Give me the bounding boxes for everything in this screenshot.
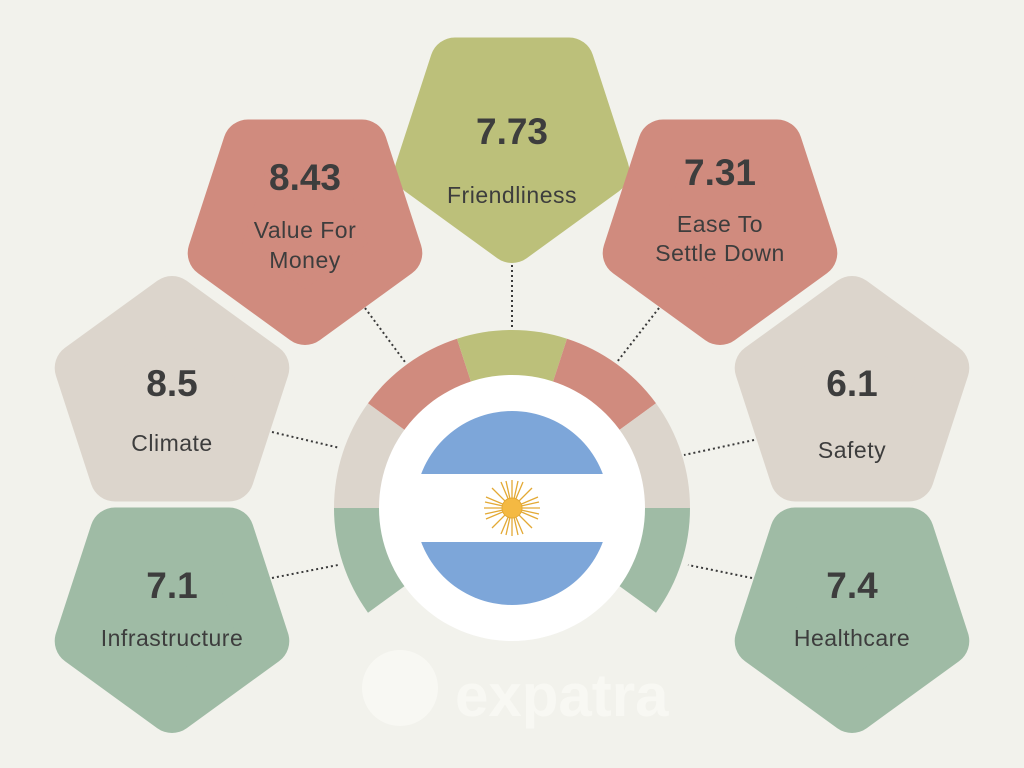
ring chart <box>334 330 690 641</box>
panel: safety <box>760 301 944 476</box>
panel: friendliness: 7.73 <box>476 111 548 152</box>
panel: ease to settle down: 7.31 <box>684 152 756 193</box>
panel: value for money: 8.43 <box>269 157 341 198</box>
panel: healthcare: 7.4 <box>826 565 878 606</box>
panel: healthcare: Healthcare <box>794 625 910 651</box>
panel: ease to settle down <box>628 144 812 320</box>
panel: value for money: Value For <box>254 217 356 243</box>
panel: ease to settle down: Ease To <box>677 211 763 237</box>
panel: safety: Safety <box>818 437 886 463</box>
logo: expatra watermark: expatra <box>455 662 669 729</box>
panel: infrastructure: 7.1 <box>146 565 198 606</box>
panel: climate: 8.5 <box>146 363 198 404</box>
panel: infrastructure: Infrastructure <box>101 625 243 651</box>
panel: friendliness <box>420 62 604 238</box>
panel: value for money: Money <box>269 247 341 273</box>
panel: value for money <box>213 144 397 320</box>
panel: healthcare <box>760 532 944 708</box>
panel: climate: Climate <box>131 430 213 456</box>
connector lines <box>272 265 754 578</box>
panel: safety: 6.1 <box>826 363 878 404</box>
panel: friendliness: Friendliness <box>447 182 577 208</box>
panel: infrastructure <box>80 532 264 708</box>
icon: argentina flag <box>421 411 603 605</box>
panel: climate <box>80 301 264 476</box>
panel: ease to settle down: Settle Down <box>655 240 785 266</box>
logo: expatra watermark <box>362 650 669 729</box>
